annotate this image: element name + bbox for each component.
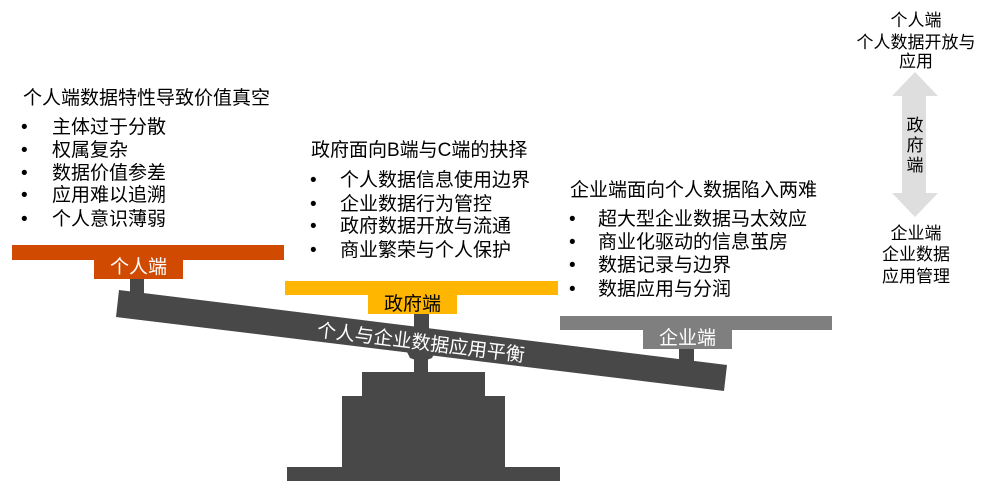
stem: government pan xyxy=(414,313,429,333)
top label: personal xyxy=(856,11,976,71)
pan: enterprise xyxy=(560,316,832,349)
bullet list: personal: • xyxy=(21,140,28,161)
text block: enterprise dilemmas xyxy=(569,179,817,300)
double arrow: government xyxy=(892,72,938,217)
bullet list: government: 个人数据信息使用边界 xyxy=(340,169,530,191)
bullet list: enterprise: 数据应用与分润 xyxy=(598,278,731,300)
pan: government: 政府端 xyxy=(384,293,441,315)
bullet list: personal: 个人意识薄弱 xyxy=(52,208,166,230)
bullet list: government: • xyxy=(310,240,317,261)
top label: personal: 应用 xyxy=(899,52,933,71)
pan: personal: 个人端 xyxy=(110,256,167,278)
bullet list: government: • xyxy=(310,194,317,215)
bullet list: personal: • xyxy=(21,185,28,206)
stem: enterprise pan xyxy=(679,348,694,368)
heading: enterprise: 企业端面向个人数据陷入两难 xyxy=(570,179,817,201)
pan: personal xyxy=(12,245,284,279)
text block: personal data issues xyxy=(21,87,270,230)
pan: government xyxy=(285,281,558,315)
heading: personal: 个人端数据特性导致价值真空 xyxy=(23,87,270,109)
bullet list: personal xyxy=(21,116,166,230)
pan: enterprise: 企业端 xyxy=(659,327,716,349)
bullet list: enterprise: • xyxy=(569,209,576,230)
bullet list: government: 企业数据行为管控 xyxy=(340,193,492,215)
heading: government: 政府面向B端与C端的抉择 xyxy=(311,139,527,161)
text block: government choices xyxy=(310,139,530,261)
scale stand xyxy=(287,350,560,481)
bullet list: government xyxy=(310,169,530,261)
bullet list: enterprise: • xyxy=(569,279,576,300)
bullet list: enterprise: 超大型企业数据马太效应 xyxy=(598,208,807,230)
bullet list: personal: • xyxy=(21,117,28,138)
bullet list: government: • xyxy=(310,216,317,237)
bullet list: personal: 应用难以追溯 xyxy=(52,184,166,206)
bottom label: enterprise: 企业端 xyxy=(890,224,942,243)
bottom label: enterprise: 企业数据 xyxy=(882,245,950,264)
bullet list: personal: 数据价值参差 xyxy=(52,162,166,184)
bullet list: government: 商业繁荣与个人保护 xyxy=(340,239,511,261)
bottom label: enterprise: 应用管理 xyxy=(882,267,950,286)
top label: personal: 个人数据开放与 xyxy=(856,33,976,52)
bullet list: personal: 主体过于分散 xyxy=(52,116,166,138)
stem: personal pan xyxy=(130,278,144,296)
bullet list: government: • xyxy=(310,170,317,191)
bullet list: personal: • xyxy=(21,163,28,184)
bullet list: enterprise: • xyxy=(569,255,576,276)
bullet list: enterprise: • xyxy=(569,232,576,253)
arrow label xyxy=(906,116,924,175)
bullet list: enterprise: 商业化驱动的信息茧房 xyxy=(598,231,788,253)
arrow label: 府 xyxy=(906,136,924,155)
scale beam xyxy=(116,290,727,391)
bullet list: personal: • xyxy=(21,209,28,230)
arrow label: 端 xyxy=(906,156,924,175)
bullet list: government: 政府数据开放与流通 xyxy=(340,215,511,237)
bottom label: enterprise xyxy=(882,224,950,286)
bullet list: enterprise xyxy=(569,208,807,300)
beam label: 个人与企业数据应用平衡 xyxy=(316,319,526,367)
bullet list: enterprise: 数据记录与边界 xyxy=(598,254,731,276)
top label: personal: 个人端 xyxy=(890,11,942,30)
bullet list: personal: 权属复杂 xyxy=(52,139,128,161)
arrow label: 政 xyxy=(906,116,924,135)
